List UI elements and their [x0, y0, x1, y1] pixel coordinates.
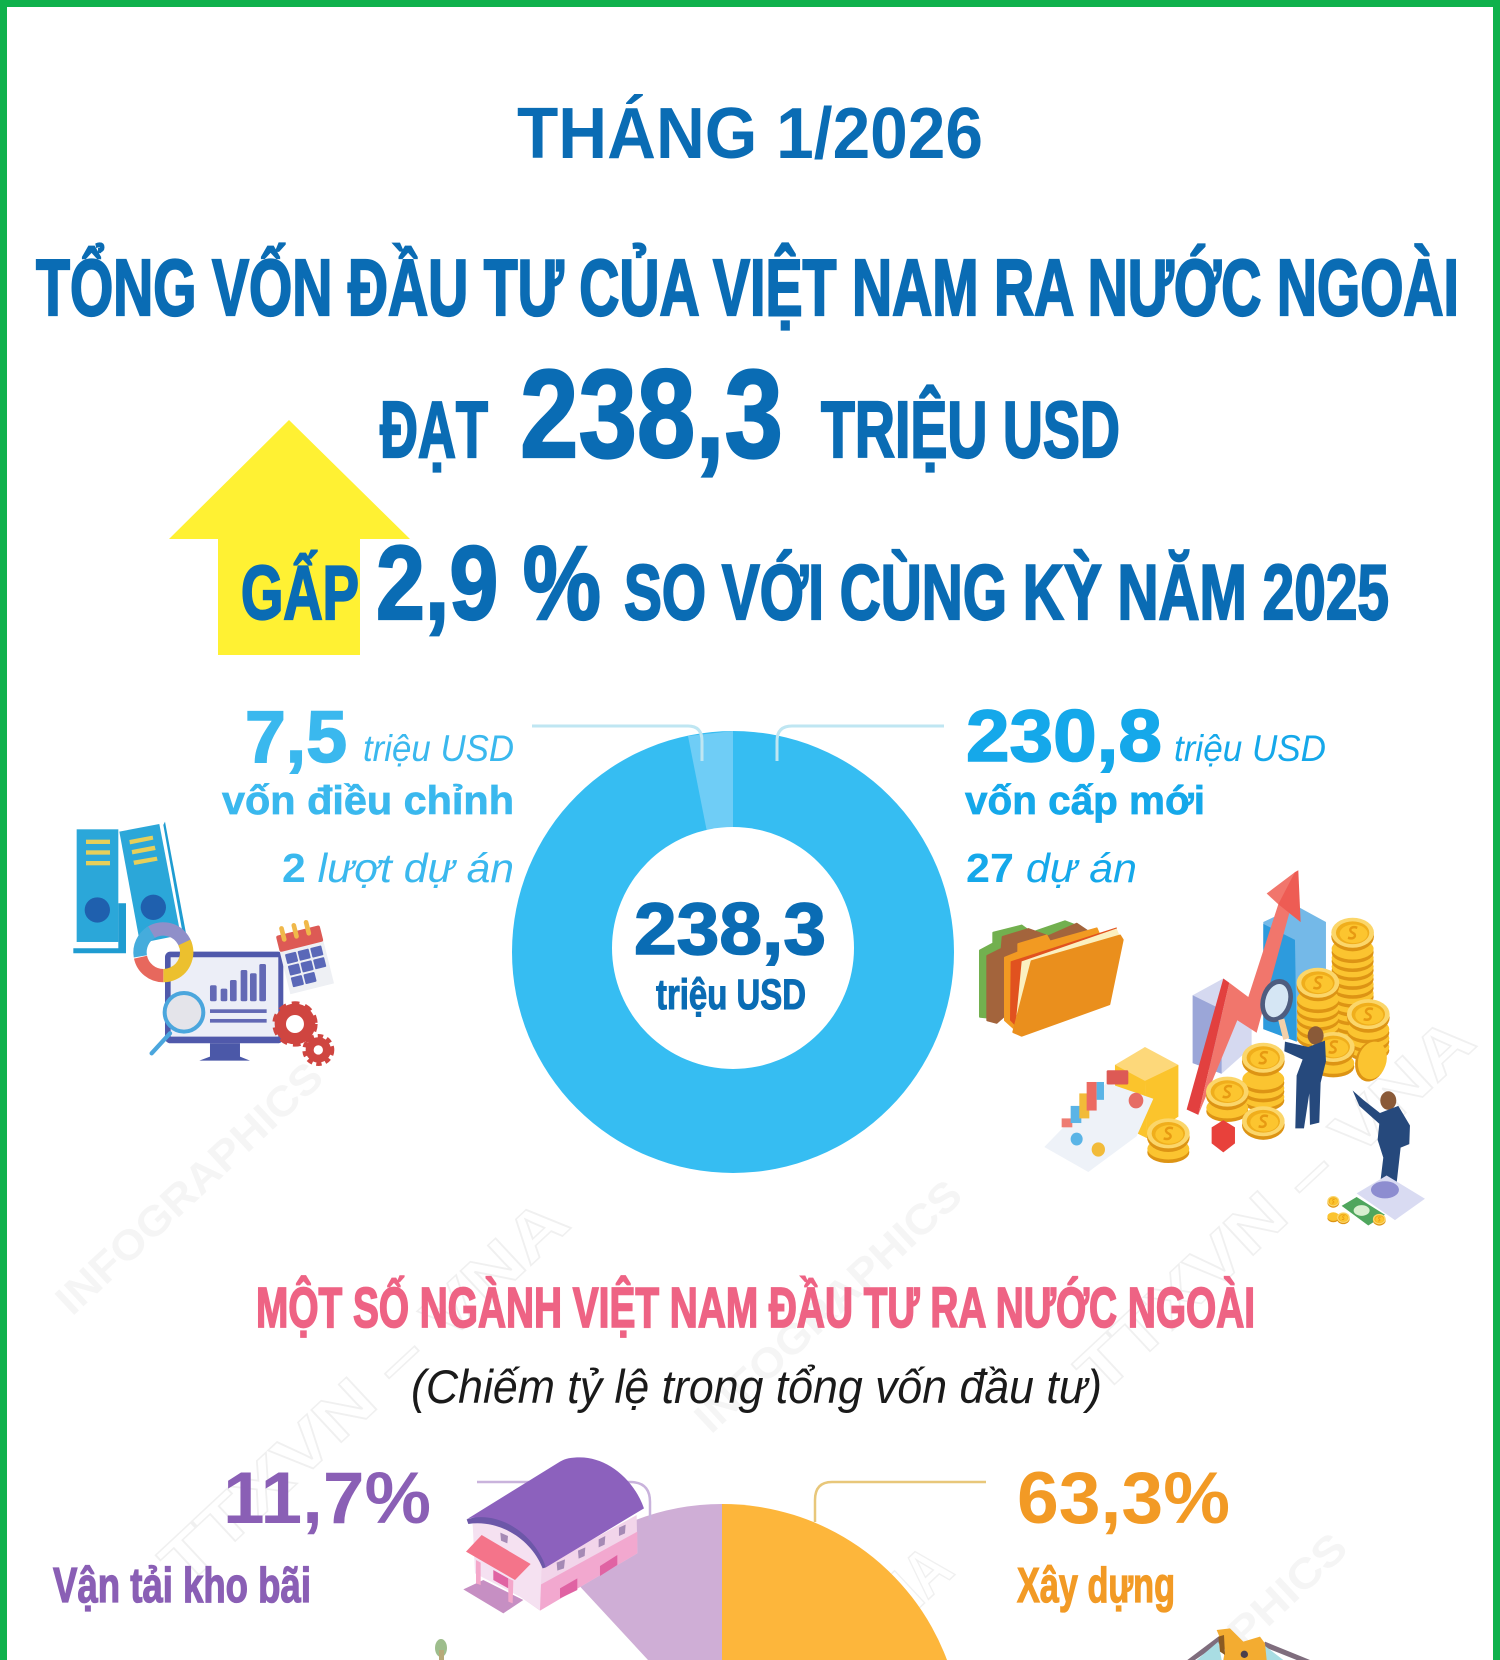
- watermarks: INFOGRAPHICS: [685, 1171, 971, 1442]
- panel: new capital text: 230,8: [966, 696, 1162, 777]
- heading: growth comparison: GẤP: [241, 551, 359, 636]
- watermarks: TTXVN – VNA: [145, 1184, 582, 1598]
- donut center unit: triệu USD: [656, 971, 806, 1019]
- heading: total value: [380, 345, 1120, 484]
- chart: capital donut: [512, 726, 954, 1173]
- coin stacks: [1147, 918, 1392, 1163]
- watermarks: VNA: [832, 1531, 966, 1660]
- watermarks: INFOGRAPHICS: [46, 1053, 332, 1324]
- icon: folders: [980, 921, 1123, 1036]
- panel: new capital text: triệu USD: [1174, 728, 1326, 769]
- panel: adjusted capital text: triệu USD: [363, 728, 514, 769]
- watermarks: TTXVN – VNA: [1061, 1003, 1488, 1407]
- heading: growth comparison: 2,9 %: [376, 525, 601, 642]
- businessman with magnifier: [1284, 1026, 1326, 1128]
- panel: adjusted capital text: vốn điều chỉnh: [222, 779, 514, 823]
- panel: adjusted capital text: 2 lượt dự án: [282, 845, 514, 891]
- label: construction sector: Xây dựng: [1017, 1559, 1175, 1613]
- label: transport sector: Vận tải kho bãi: [53, 1559, 311, 1613]
- label: construction share: 63,3%: [1017, 1458, 1230, 1539]
- paper report: [1044, 1083, 1153, 1172]
- icon: warehouse: [463, 1457, 644, 1613]
- heading: month: THÁNG 1/2026: [517, 94, 983, 174]
- magnifying glass: [1258, 977, 1295, 1024]
- icon: binders and monitor: [73, 822, 334, 1064]
- panel: new capital text: vốn cấp mới: [965, 779, 1205, 823]
- watermarks: [46, 1003, 1488, 1660]
- pedestal and money: [1357, 1176, 1425, 1220]
- label: transport share: 11,7%: [223, 1458, 431, 1539]
- panel: new capital text: [965, 696, 1326, 891]
- panel: new capital text: 27 dự án: [966, 845, 1137, 891]
- heading: growth comparison: [241, 525, 1389, 642]
- icon: yellow up arrow: [169, 420, 410, 655]
- section subtitle: (Chiếm tỷ lệ trong tổng vốn đầu tư): [411, 1360, 1102, 1413]
- donut center value: 238,3: [634, 889, 826, 970]
- heading: total value: 238,3: [520, 345, 783, 484]
- panel: adjusted capital text: [222, 697, 514, 891]
- heading: total value: TRIỆU USD: [821, 385, 1120, 474]
- watermarks: PHICS: [1218, 1523, 1356, 1657]
- businessman pointing: [1353, 1091, 1410, 1191]
- panel: adjusted capital text: 7,5: [245, 697, 347, 778]
- illustration: growth chart, coins and businessmen: [1044, 870, 1425, 1226]
- chart: sector pie: [477, 1482, 986, 1660]
- icon: crane top: [1187, 1628, 1310, 1660]
- heading: total value: ĐẠT: [380, 385, 488, 474]
- icon: plant: [435, 1639, 447, 1660]
- red cube: [1212, 1120, 1235, 1152]
